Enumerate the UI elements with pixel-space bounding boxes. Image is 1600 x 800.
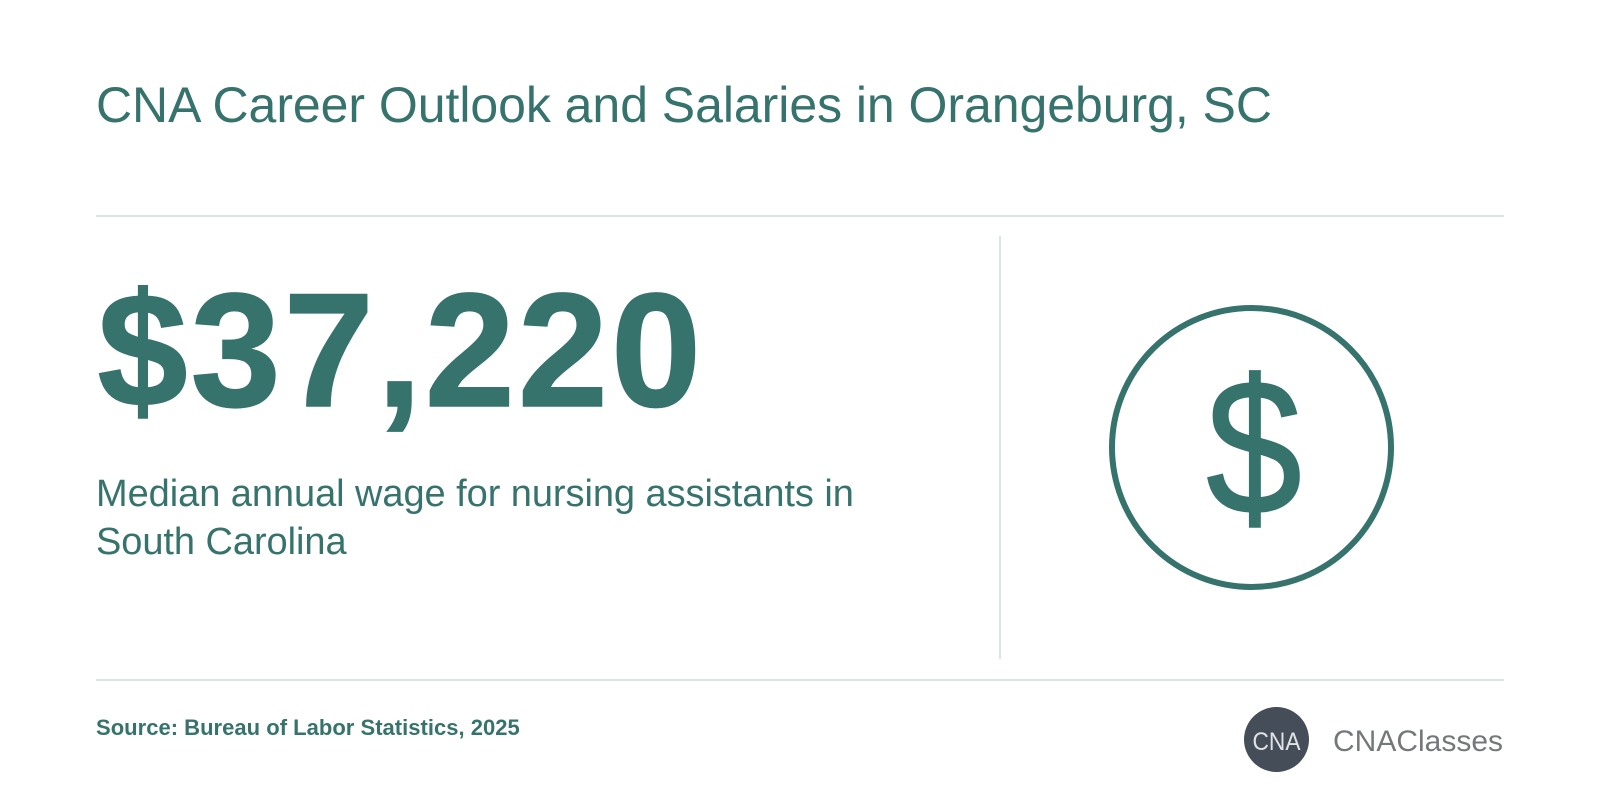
logo: CNAClasses [1244,707,1503,772]
icon: dollar in circle [1109,305,1394,590]
source note: Source: Bureau of Labor Statistics, 2025 [96,715,520,740]
wage description: Median annual wage for nursing assistants in [96,473,854,515]
logo: CNAClasses: CNA [1252,728,1301,756]
icon: dollar in circle: $ [1206,340,1302,555]
title: CNA Career Outlook and Salaries in Orangeburg, SC [96,77,1272,133]
big wage figure: $37,220 [98,260,704,441]
wage description: South Carolina [96,521,347,563]
wage description [96,473,854,563]
logo: CNAClasses: CNAClasses [1333,725,1503,758]
